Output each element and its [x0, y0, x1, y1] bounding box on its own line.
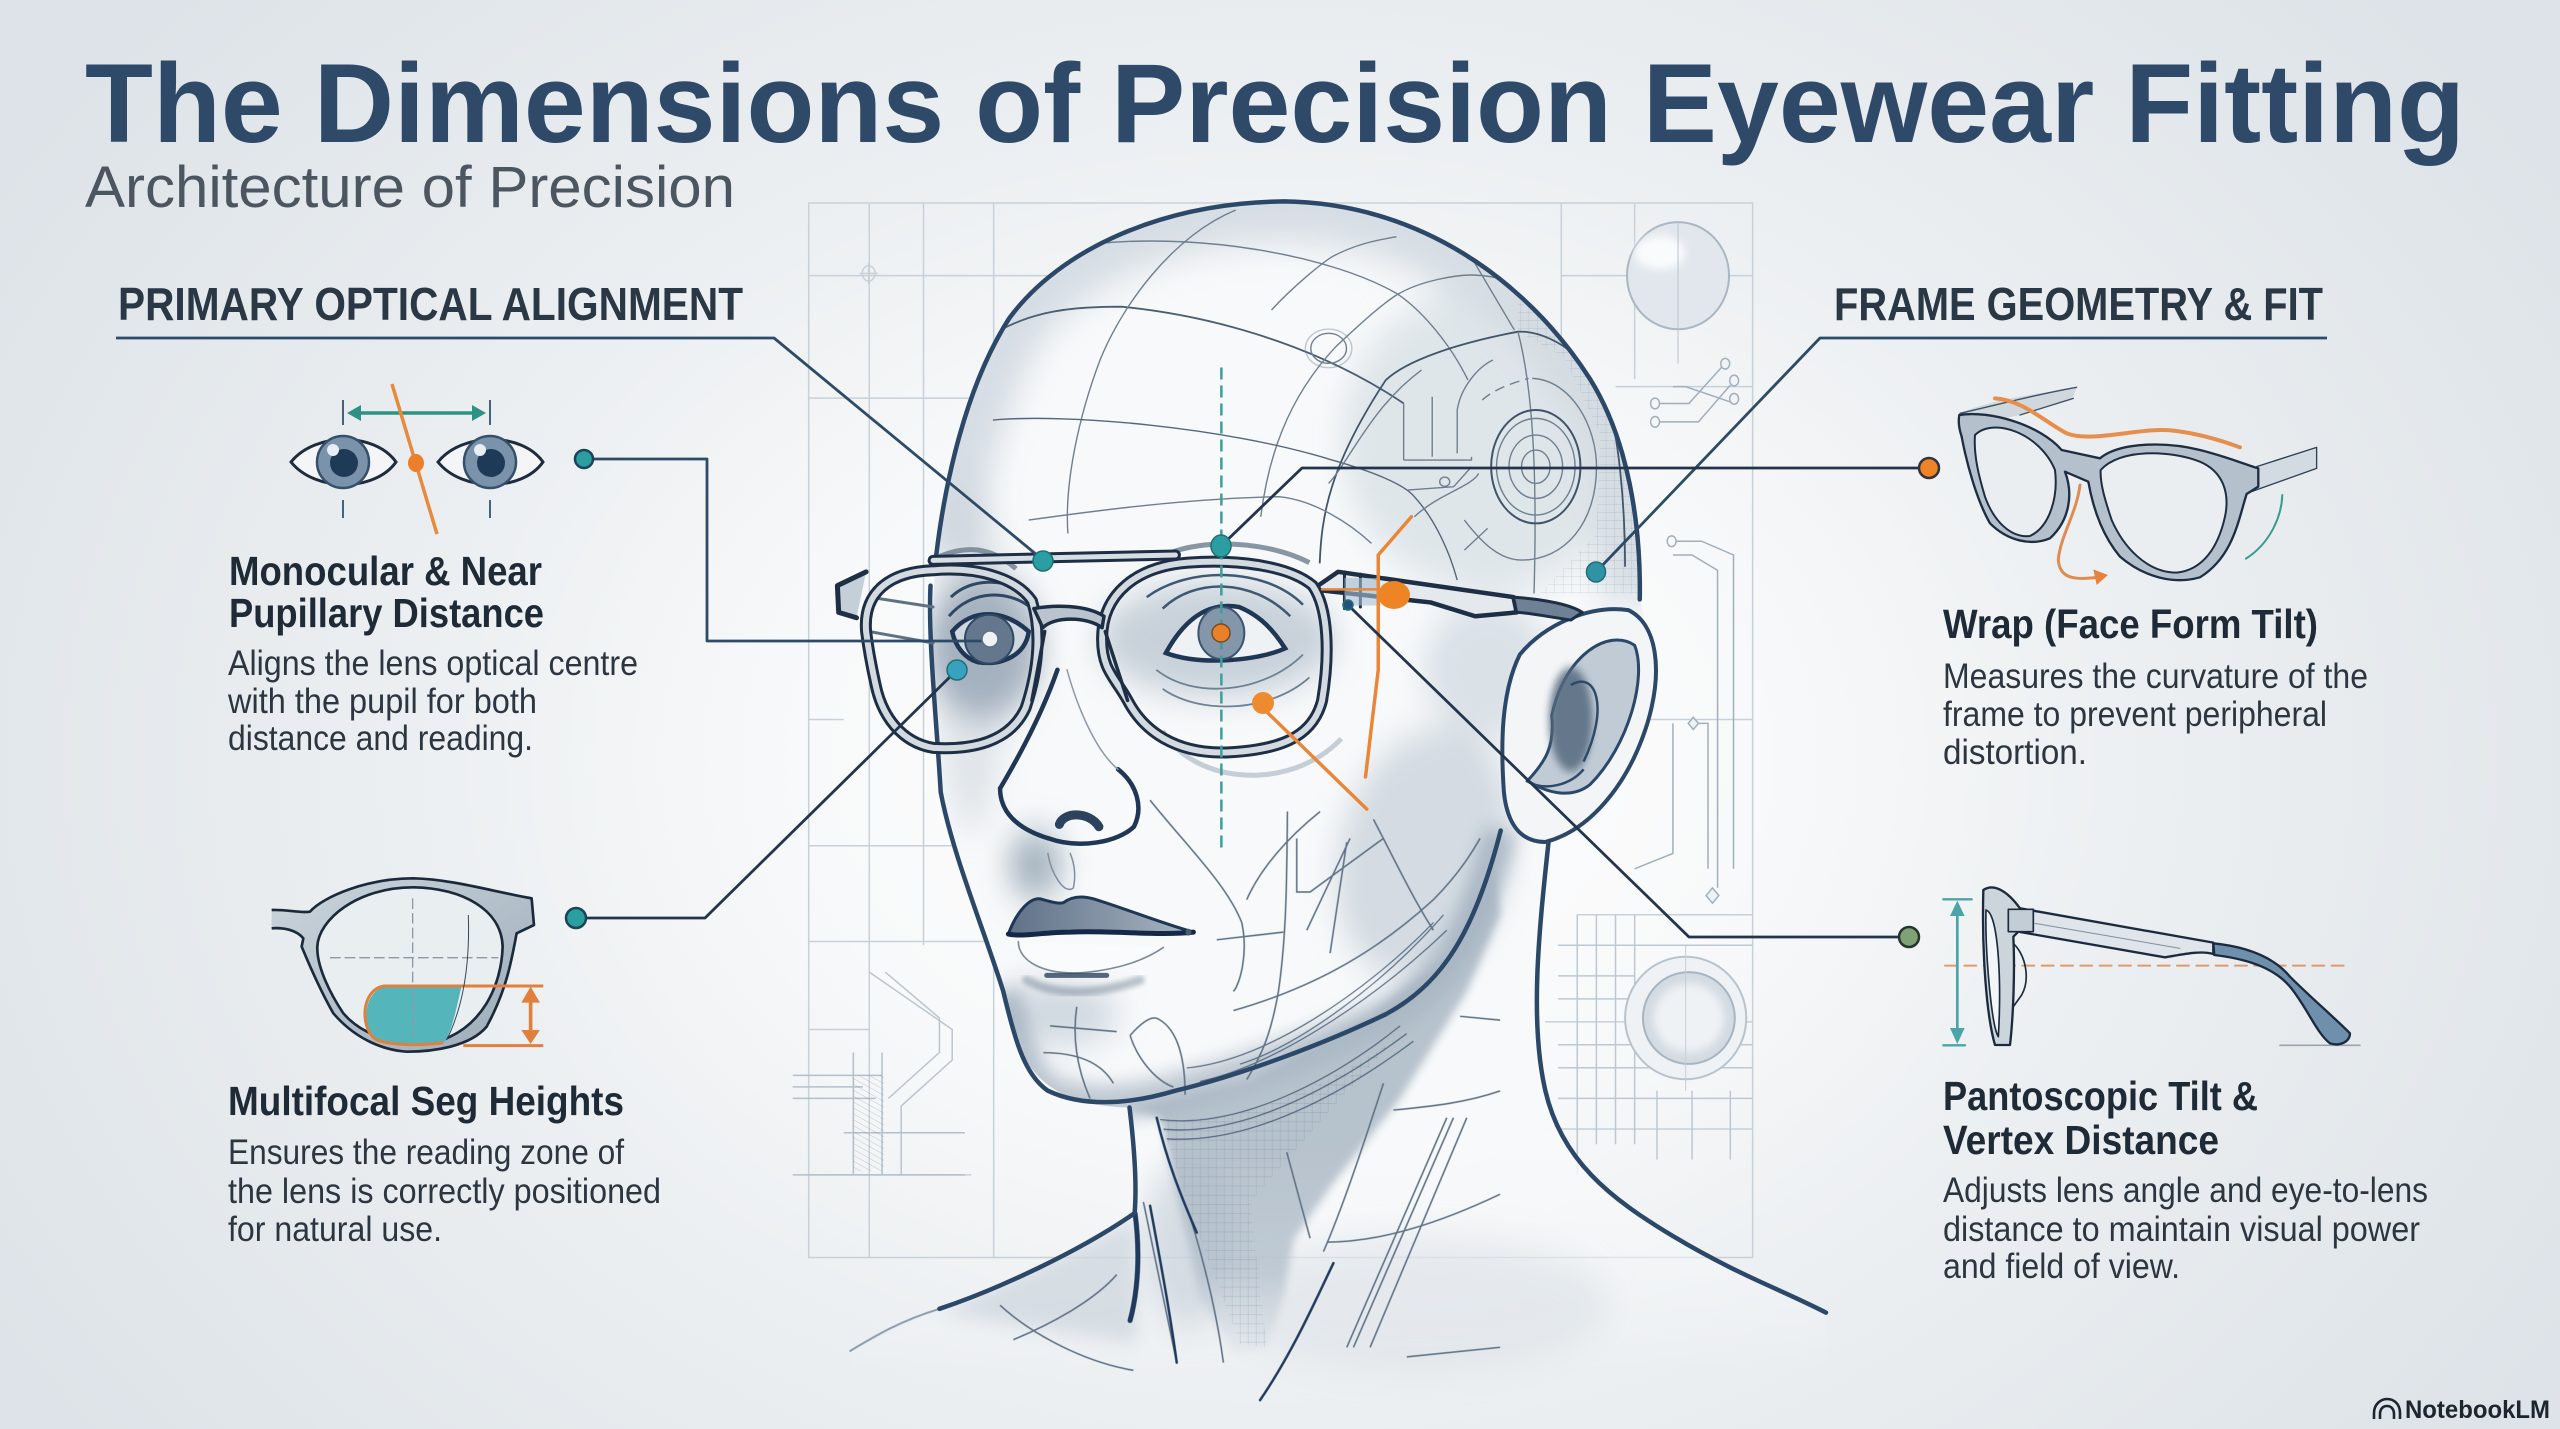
panel: monocular text: [227, 548, 638, 758]
body text: frame to prevent peripheral: [1943, 695, 2327, 734]
body text: and field of view.: [1943, 1247, 2180, 1286]
icon: notebook logo: [2374, 1399, 2400, 1419]
dot: monocular connector: [575, 450, 593, 468]
body text: distance to maintain visual power: [1943, 1210, 2420, 1249]
bridge: [1034, 606, 1104, 628]
heading: Pantoscopic Tilt &: [1943, 1073, 2258, 1119]
small crosshair: [860, 263, 878, 284]
body text: distance and reading.: [228, 719, 533, 758]
connector lines: [116, 338, 2327, 937]
lower neck strokes: [1130, 1118, 1333, 1400]
heading: Monocular & Near: [229, 548, 542, 594]
dot: multifocal connector: [566, 908, 586, 928]
glasses: [837, 555, 1582, 753]
circuit traces: [1635, 358, 1739, 903]
nose: [1000, 670, 1138, 889]
connector: pantoscopic: [1348, 605, 1909, 937]
panel: pantoscopic text: [1943, 1073, 2428, 1286]
head base shape: [850, 201, 1826, 1429]
dot: pantoscopic connector: [1899, 927, 1919, 947]
lens sphere top right: [1627, 222, 1729, 364]
body text: Measures the curvature of the: [1943, 657, 2368, 696]
body text: for natural use.: [228, 1210, 442, 1249]
orange measurement lines: [1263, 517, 1411, 809]
head outline: [850, 201, 1826, 1351]
body text: [1943, 657, 2368, 772]
central head illustration: [793, 201, 1826, 1429]
shoulder shade: [939, 1217, 1137, 1343]
title: The Dimensions of Precision Eyewear Fitting: [85, 41, 2465, 166]
body text: Adjusts lens angle and eye-to-lens: [1943, 1171, 2428, 1210]
section heading: primary optical alignment: PRIMARY OPTICAL ALIGNMENT: [118, 278, 743, 330]
body text: the lens is correctly positioned: [228, 1172, 661, 1211]
left end piece: [837, 572, 866, 618]
heading: Multifocal Seg Heights: [228, 1078, 624, 1124]
icon: side-view glasses with tilt: [1943, 887, 2360, 1045]
eye: left side: [949, 582, 1032, 664]
brows: [939, 544, 1309, 569]
watermark text: NotebookLM: [2405, 1396, 2550, 1424]
icon: wrap angle glasses: [1959, 387, 2317, 585]
head shading: [921, 201, 1647, 1400]
temple arm right: [1313, 572, 1582, 620]
connector: wrap: [1221, 468, 1929, 546]
body text: distortion.: [1943, 733, 2087, 772]
NotebookLM watermark: [2374, 1396, 2550, 1424]
cranium wireframe: [992, 210, 1638, 594]
right lens rim: [1102, 562, 1327, 753]
body text: [1943, 1171, 2428, 1286]
eye: right side: [1147, 575, 1341, 775]
mouth: [1008, 897, 1193, 992]
section heading: frame geometry and fit: FRAME GEOMETRY & FIT: [1834, 278, 2323, 330]
icon: multifocal lens: [272, 878, 543, 1052]
neck shading and face detail: [1000, 800, 1500, 1400]
heading: Wrap (Face Form Tilt): [1943, 601, 2318, 647]
connector: primary optical alignment: [116, 338, 1043, 560]
body text: [227, 644, 638, 758]
jaw edge shading: [1003, 831, 1501, 1102]
body text: [228, 1133, 661, 1249]
subtitle: Architecture of Precision: [85, 155, 735, 220]
body text: Ensures the reading zone of: [228, 1133, 624, 1172]
body text: Aligns the lens optical centre: [228, 644, 638, 683]
connector: frame geometry: [1596, 338, 2327, 572]
left lens rim: [866, 570, 1037, 748]
brow bar: [933, 555, 1175, 560]
panel: wrap text: [1943, 601, 2368, 772]
panel: multifocal text: [228, 1078, 661, 1249]
ear: [1502, 609, 1656, 842]
heading line two: Vertex Distance: [1943, 1117, 2219, 1163]
heading line two: Pupillary Distance: [229, 590, 544, 636]
connector: multifocal: [576, 670, 957, 918]
lens sphere bottom right: [1625, 945, 1746, 1091]
dot: wrap connector: [1919, 458, 1939, 478]
blueprint background grid: [793, 203, 1753, 1258]
body text: with the pupil for both: [227, 682, 537, 721]
connector: monocular PD: [584, 459, 985, 641]
anchor dots on head: [947, 535, 1606, 714]
icon: eyes with pupillary distance: [291, 384, 543, 534]
centre dashed alignment line: [1220, 367, 1223, 850]
